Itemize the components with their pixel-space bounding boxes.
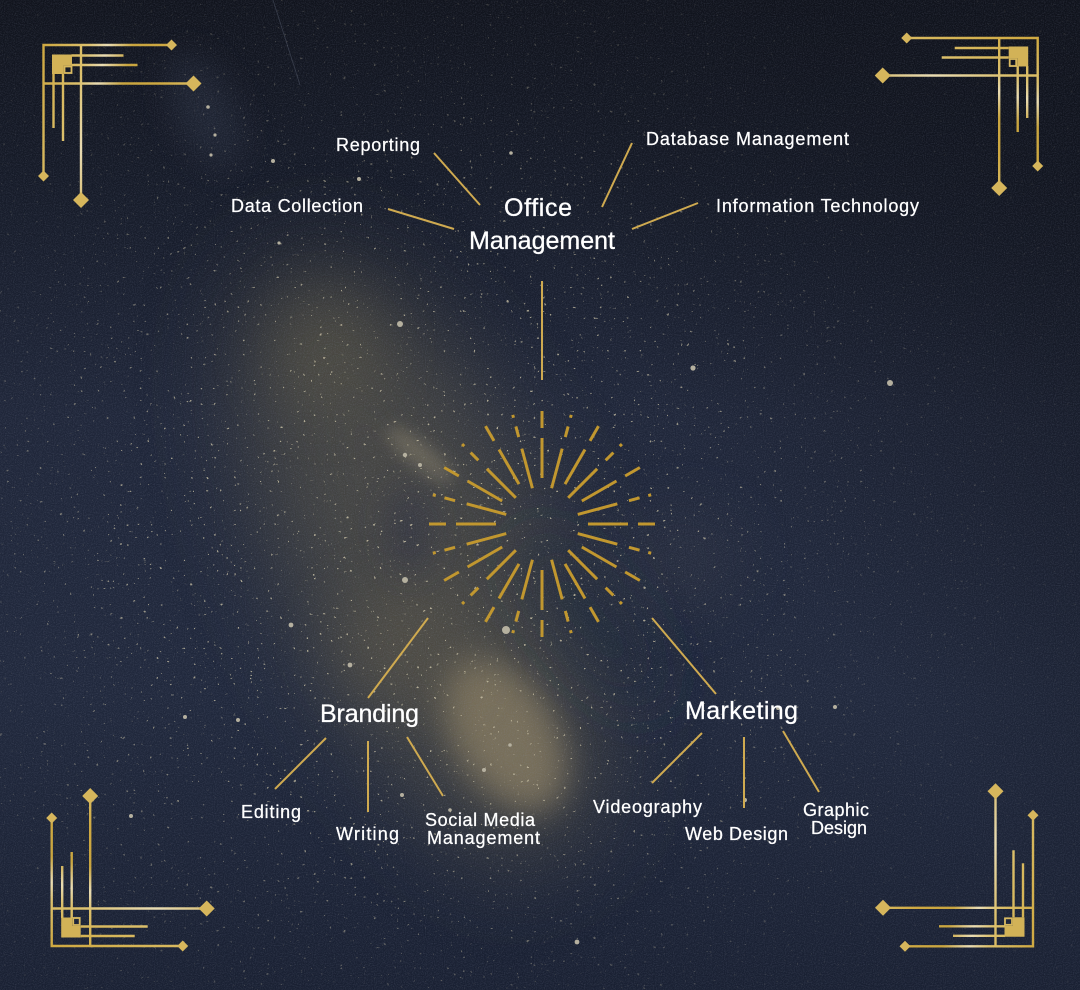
label: Reporting: Reporting bbox=[336, 135, 420, 155]
connector: sunburst to Office Management bbox=[541, 281, 543, 380]
connector: sunburst to Marketing bbox=[652, 618, 716, 694]
label: Social Media Management: Management bbox=[427, 828, 540, 848]
label: Data Collection: Data Collection bbox=[231, 196, 363, 216]
heading: Office Management: Office bbox=[504, 194, 572, 222]
corner ornament: top left bbox=[38, 40, 202, 208]
corner ornament: top right bbox=[875, 32, 1043, 196]
heading: Office Management: Management bbox=[469, 227, 615, 255]
heading: Branding: Branding bbox=[320, 700, 419, 728]
branch: Office Management bbox=[231, 129, 919, 255]
heading: Marketing: Marketing bbox=[685, 697, 798, 725]
label: Writing: Writing bbox=[336, 824, 399, 844]
label: Information Technology: Information Technology bbox=[716, 196, 919, 216]
connector: sunburst to Branding bbox=[368, 618, 428, 698]
label: Graphic Design: Graphic bbox=[803, 800, 869, 820]
connectors: Marketing sub-topics bbox=[652, 731, 819, 808]
label: Editing: Editing bbox=[241, 802, 301, 822]
sunburst at centre of the diagram bbox=[429, 411, 655, 637]
corner ornament: bottom right bbox=[875, 783, 1038, 952]
connectors: Branding sub-topics bbox=[275, 737, 443, 812]
connectors: Office Management sub-topics bbox=[388, 143, 698, 229]
label: Web Design: Web Design bbox=[685, 824, 788, 844]
label: Database Management: Database Management bbox=[646, 129, 849, 149]
label: Videography: Videography bbox=[593, 797, 702, 817]
label: Graphic Design: Design bbox=[811, 818, 867, 838]
branch: Marketing bbox=[593, 697, 869, 844]
corner ornament: bottom left bbox=[46, 788, 215, 952]
label: Social Media Management: Social Media bbox=[425, 810, 536, 830]
branch: Branding bbox=[241, 700, 540, 848]
